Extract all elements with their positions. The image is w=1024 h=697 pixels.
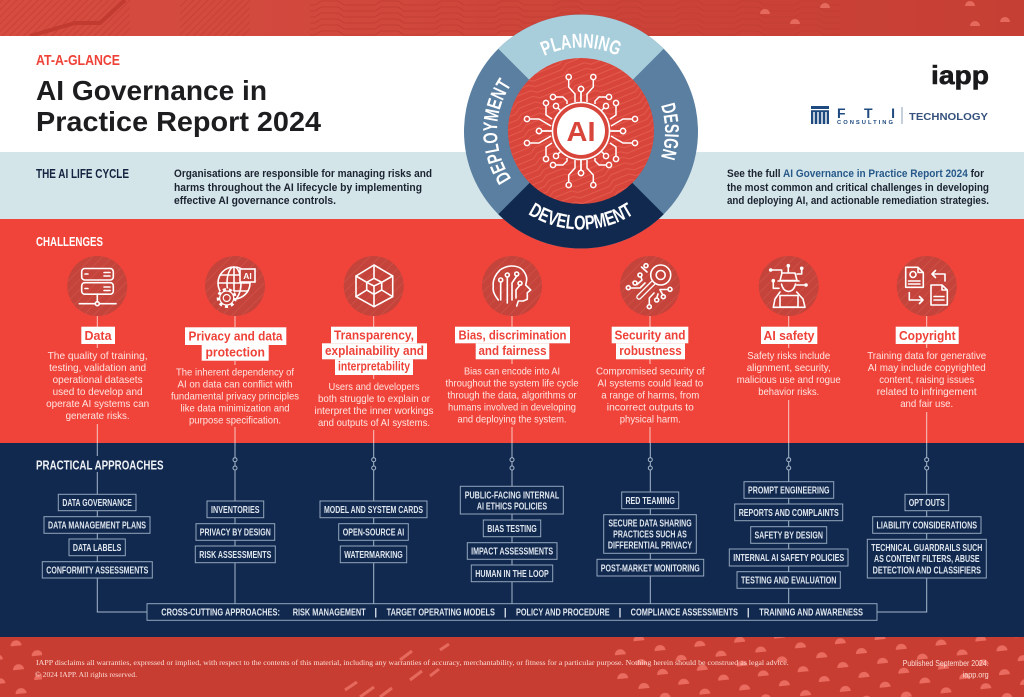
approaches: bias: BIAS TESTING [487,524,537,535]
approaches: security: POST-MARKET MONITORING [601,563,700,574]
text: security description [596,366,705,426]
text: bias description: through the data, algorithms or [448,390,577,402]
logo: FTI Consulting Technology: F T I [837,105,895,121]
text: AI safety description: malicious use and rogue [737,374,841,386]
cross-cutting approaches bar: TARGET OPERATING MODELS [387,608,495,618]
approaches: privacy: INVENTORIES [211,505,260,516]
approaches: AI safety: SAFETY BY DESIGN [754,531,823,542]
icon: AI chip circuit [524,74,638,188]
footer publication info [903,659,989,680]
approaches: privacy: RISK ASSESSMENTS [199,550,272,561]
cross-cutting approaches bar: COMPLIANCE ASSESSMENTS [631,608,738,618]
title: transparency, explainability and interpretability: explainability and [325,343,424,358]
wheel: development segment [498,132,664,248]
text: security description: a range of harms, from [601,390,700,402]
challenge: privacy and data protection [171,256,299,443]
text: privacy description: AI on data can conflict with [178,378,293,390]
report reference text [727,168,989,207]
cross-cutting approaches bar: CROSS-CUTTING APPROACHES: [161,608,280,618]
text: privacy description [171,366,299,426]
title: AI safety: AI safety [764,328,815,343]
report reference text: the most common and critical challenges in developing [727,182,989,194]
text: privacy description: The inherent dependency of [176,366,294,378]
text: data description: operate AI systems can [46,398,149,410]
approaches: AI safety: PROMPT ENGINEERING [748,486,830,497]
text: privacy description: purpose specification. [189,414,281,426]
approaches: copyright: DETECTION AND CLASSIFIERS [873,565,981,576]
text: privacy description: like data minimization and [180,402,290,414]
approaches: privacy: PRIVACY BY DESIGN [200,528,271,539]
text: bias description: humans involved in developing [448,402,576,414]
cross-cutting approaches bar [147,604,877,620]
life cycle label: THE AI LIFE CYCLE [36,167,129,181]
life cycle intro text [174,168,432,207]
text: AI safety description [737,350,841,398]
approaches: AI safety: TESTING AND EVALUATION [741,576,836,587]
challenge: copyright [867,256,986,443]
title: Practice Report 2024 [36,106,322,137]
challenge: AI safety [737,256,841,443]
approaches: copyright [867,494,986,578]
text: data description: The quality of training, [48,350,148,362]
text: bias description: and deploying the system. [458,414,566,426]
cross-cutting approaches bar: | [619,608,621,618]
approaches: security: SECURE DATA SHARING [608,518,692,529]
approaches: security [597,492,704,576]
top circuit band [0,0,1024,36]
text: data description: operational datasets [53,374,143,386]
title: bias, discrimination and fairness [455,327,570,359]
text: security description: AI systems could lead to [597,378,703,390]
report reference text: See the full AI Governance in Practice Report 2024 for [727,168,984,180]
cross-cutting approaches bar: RISK MANAGEMENT [293,608,366,618]
title: transparency, explainability and interpretability: Transparency, [334,328,414,342]
approaches: bias [460,486,563,582]
approaches: bias: IMPACT ASSESSMENTS [471,547,553,558]
heading: practical approaches: PRACTICAL APPROACHES [36,458,164,472]
cross-cutting approaches bar: POLICY AND PROCEDURE [516,608,610,618]
wheel: inner red hub [508,58,654,204]
text: data description [46,350,149,422]
approaches: bias: AI ETHICS POLICIES [477,502,547,513]
text: copyright description: and fair use. [900,398,953,410]
AI life cycle wheel [464,14,698,248]
approaches: copyright: AS CONTENT FILTERS, ABUSE [874,554,980,565]
footer disclaimer: IAPP disclaims all warranties, expressed or implied, with respect to the contents of this material, including any warranties of accuracy, merchantability, or fitness for a particular purpose. Nothing herein should be construed as legal advice. [36,658,789,667]
text: copyright description: Training data for generative [867,350,986,362]
wheel: design and deployment ring [464,14,698,248]
life cycle intro text: effective AI governance controls. [174,195,336,207]
footer disclaimer: © 2024 IAPP. All rights reserved. [35,670,137,679]
cross-cutting approaches bar: | [747,608,750,618]
life cycle intro text: harms throughout the AI lifecycle by implementing [174,182,422,194]
approaches: security: RED TEAMING [625,496,675,507]
approaches: data: DATA GOVERNANCE [62,498,132,509]
icon: head with circuits [482,256,542,316]
approaches: bias: PUBLIC-FACING INTERNAL [465,490,559,502]
red challenges panel [0,219,1024,443]
title: transparency, explainability and interpretability [322,327,427,375]
icon: key with circuits [620,256,680,316]
text: copyright description [867,350,986,410]
icon: AI chip circuit: AI [566,116,596,147]
title: AI Governance in [36,75,267,106]
text: AI safety description: behavior risks. [758,386,819,398]
text: security description: physical harm. [620,414,681,426]
title: security and robustness [612,327,688,359]
footer publication info: Published September 2024. [903,659,989,668]
title: privacy and data protection [185,327,286,361]
text: transparency description: interpret the inner workings [314,405,434,417]
icon: globe, gear and AI badge: AI [243,271,252,281]
approaches: transparency [320,501,427,563]
logo: FTI Consulting Technology: CONSULTING [837,120,893,126]
approaches: copyright: LIABILITY CONSIDERATIONS [877,520,977,532]
text: copyright description: AI may include copyrighted [868,362,986,374]
approaches: privacy [195,501,275,563]
text: copyright description: related to infringement [877,386,977,398]
approaches: bias: HUMAN IN THE LOOP [475,569,549,580]
icon: wireframe cube [344,256,404,316]
eyebrow: at-a-glance: AT-A-GLANCE [36,52,120,69]
report reference text: and deploying AI, and actionable remediation strategies. [727,195,989,207]
text: AI safety description: alignment, security, [747,362,831,374]
approaches: data [42,494,152,578]
text: transparency description: Users and developers [328,381,420,393]
text: data description: testing, validation and [49,362,146,374]
footer circuit band [0,637,1024,697]
text: transparency description: both struggle to explain or [318,393,430,405]
text: security description: incorrect outputs to [607,402,694,414]
title: transparency, explainability and interpretability: interpretability [338,358,411,374]
cross-cutting approaches bar: | [504,608,507,618]
approaches: data: CONFORMITY ASSESSMENTS [46,565,149,576]
approaches: AI safety [729,482,848,588]
approaches: security: DIFFERENTIAL PRIVACY [608,541,692,552]
title: security and robustness: robustness [619,343,682,358]
approaches: data: DATA LABELS [73,543,122,554]
icon: hacker with laptop [759,256,819,316]
text: data description: used to develop and [53,386,143,398]
white header band [0,36,1024,152]
navy practical approaches panel [0,443,1024,637]
text: copyright description: content, raising issues [879,374,974,386]
icon: globe, gear and AI badge [205,256,265,316]
title: security and robustness: Security and [614,328,686,342]
footer disclaimer [35,658,789,679]
light blue life cycle band [0,152,1024,219]
title: data: Data [84,328,112,343]
title: privacy and data protection: Privacy and data [188,328,283,344]
challenge: data [46,256,149,443]
text: transparency description [314,381,434,429]
heading: challenges: CHALLENGES [36,235,103,249]
title [36,75,322,137]
approaches: AI safety: INTERNAL AI SAFETY POLICIES [733,553,845,564]
approaches: AI safety: REPORTS AND COMPLAINTS [739,508,839,519]
text: privacy description: fundamental privacy principles [171,390,299,402]
title: privacy and data protection: protection [205,344,265,360]
approaches: copyright: OPT OUTS [909,498,945,509]
title: bias, discrimination and fairness: Bias, discrimination [458,328,567,342]
text: bias description: Bias can encode into AI [464,366,560,378]
challenge: transparency [314,256,434,443]
label: planning: PLANNING [540,34,621,56]
challenge: bias [446,256,579,443]
text: security description: Compromised security of [596,366,705,378]
text: bias description: throughout the system life cycle [446,378,579,390]
approaches: security: PRACTICES SUCH AS [613,530,687,540]
connector lines [97,443,929,612]
approaches: copyright: TECHNICAL GUARDRAILS SUCH [871,543,982,554]
icon: data servers [67,256,127,316]
cross-cutting approaches bar: | [374,608,377,618]
label: deployment: DEPLOYMENT [483,77,511,186]
logo: FTI Consulting Technology: TECHNOLOGY [909,111,988,123]
approaches: data: DATA MANAGEMENT PLANS [48,520,146,532]
label: development: DEVELOPMENT [528,202,632,230]
text: transparency description: and outputs of AI systems. [318,417,430,429]
text: data description: generate risks. [66,410,130,422]
approaches: transparency: OPEN-SOURCE AI [343,528,404,539]
logo: iapp: iapp [931,60,989,90]
icon: documents with arrows [897,256,957,316]
approaches: transparency: WATERMARKING [344,550,403,561]
logo: FTI Consulting Technology [811,105,988,126]
title: copyright: Copyright [899,328,956,343]
label: design: DESIGN [661,102,679,160]
text: bias description [446,366,579,426]
challenge: security [596,256,705,443]
footer publication info: iapp.org [963,670,989,680]
wheel: planning segment [498,15,664,131]
text: AI safety description: Safety risks include [747,350,830,362]
title: bias, discrimination and fairness: and fairness [478,343,546,358]
approaches: transparency: MODEL AND SYSTEM CARDS [324,505,423,516]
life cycle intro text: Organisations are responsible for managing risks and [174,168,432,180]
cross-cutting approaches bar: TRAINING AND AWARENESS [759,608,863,618]
